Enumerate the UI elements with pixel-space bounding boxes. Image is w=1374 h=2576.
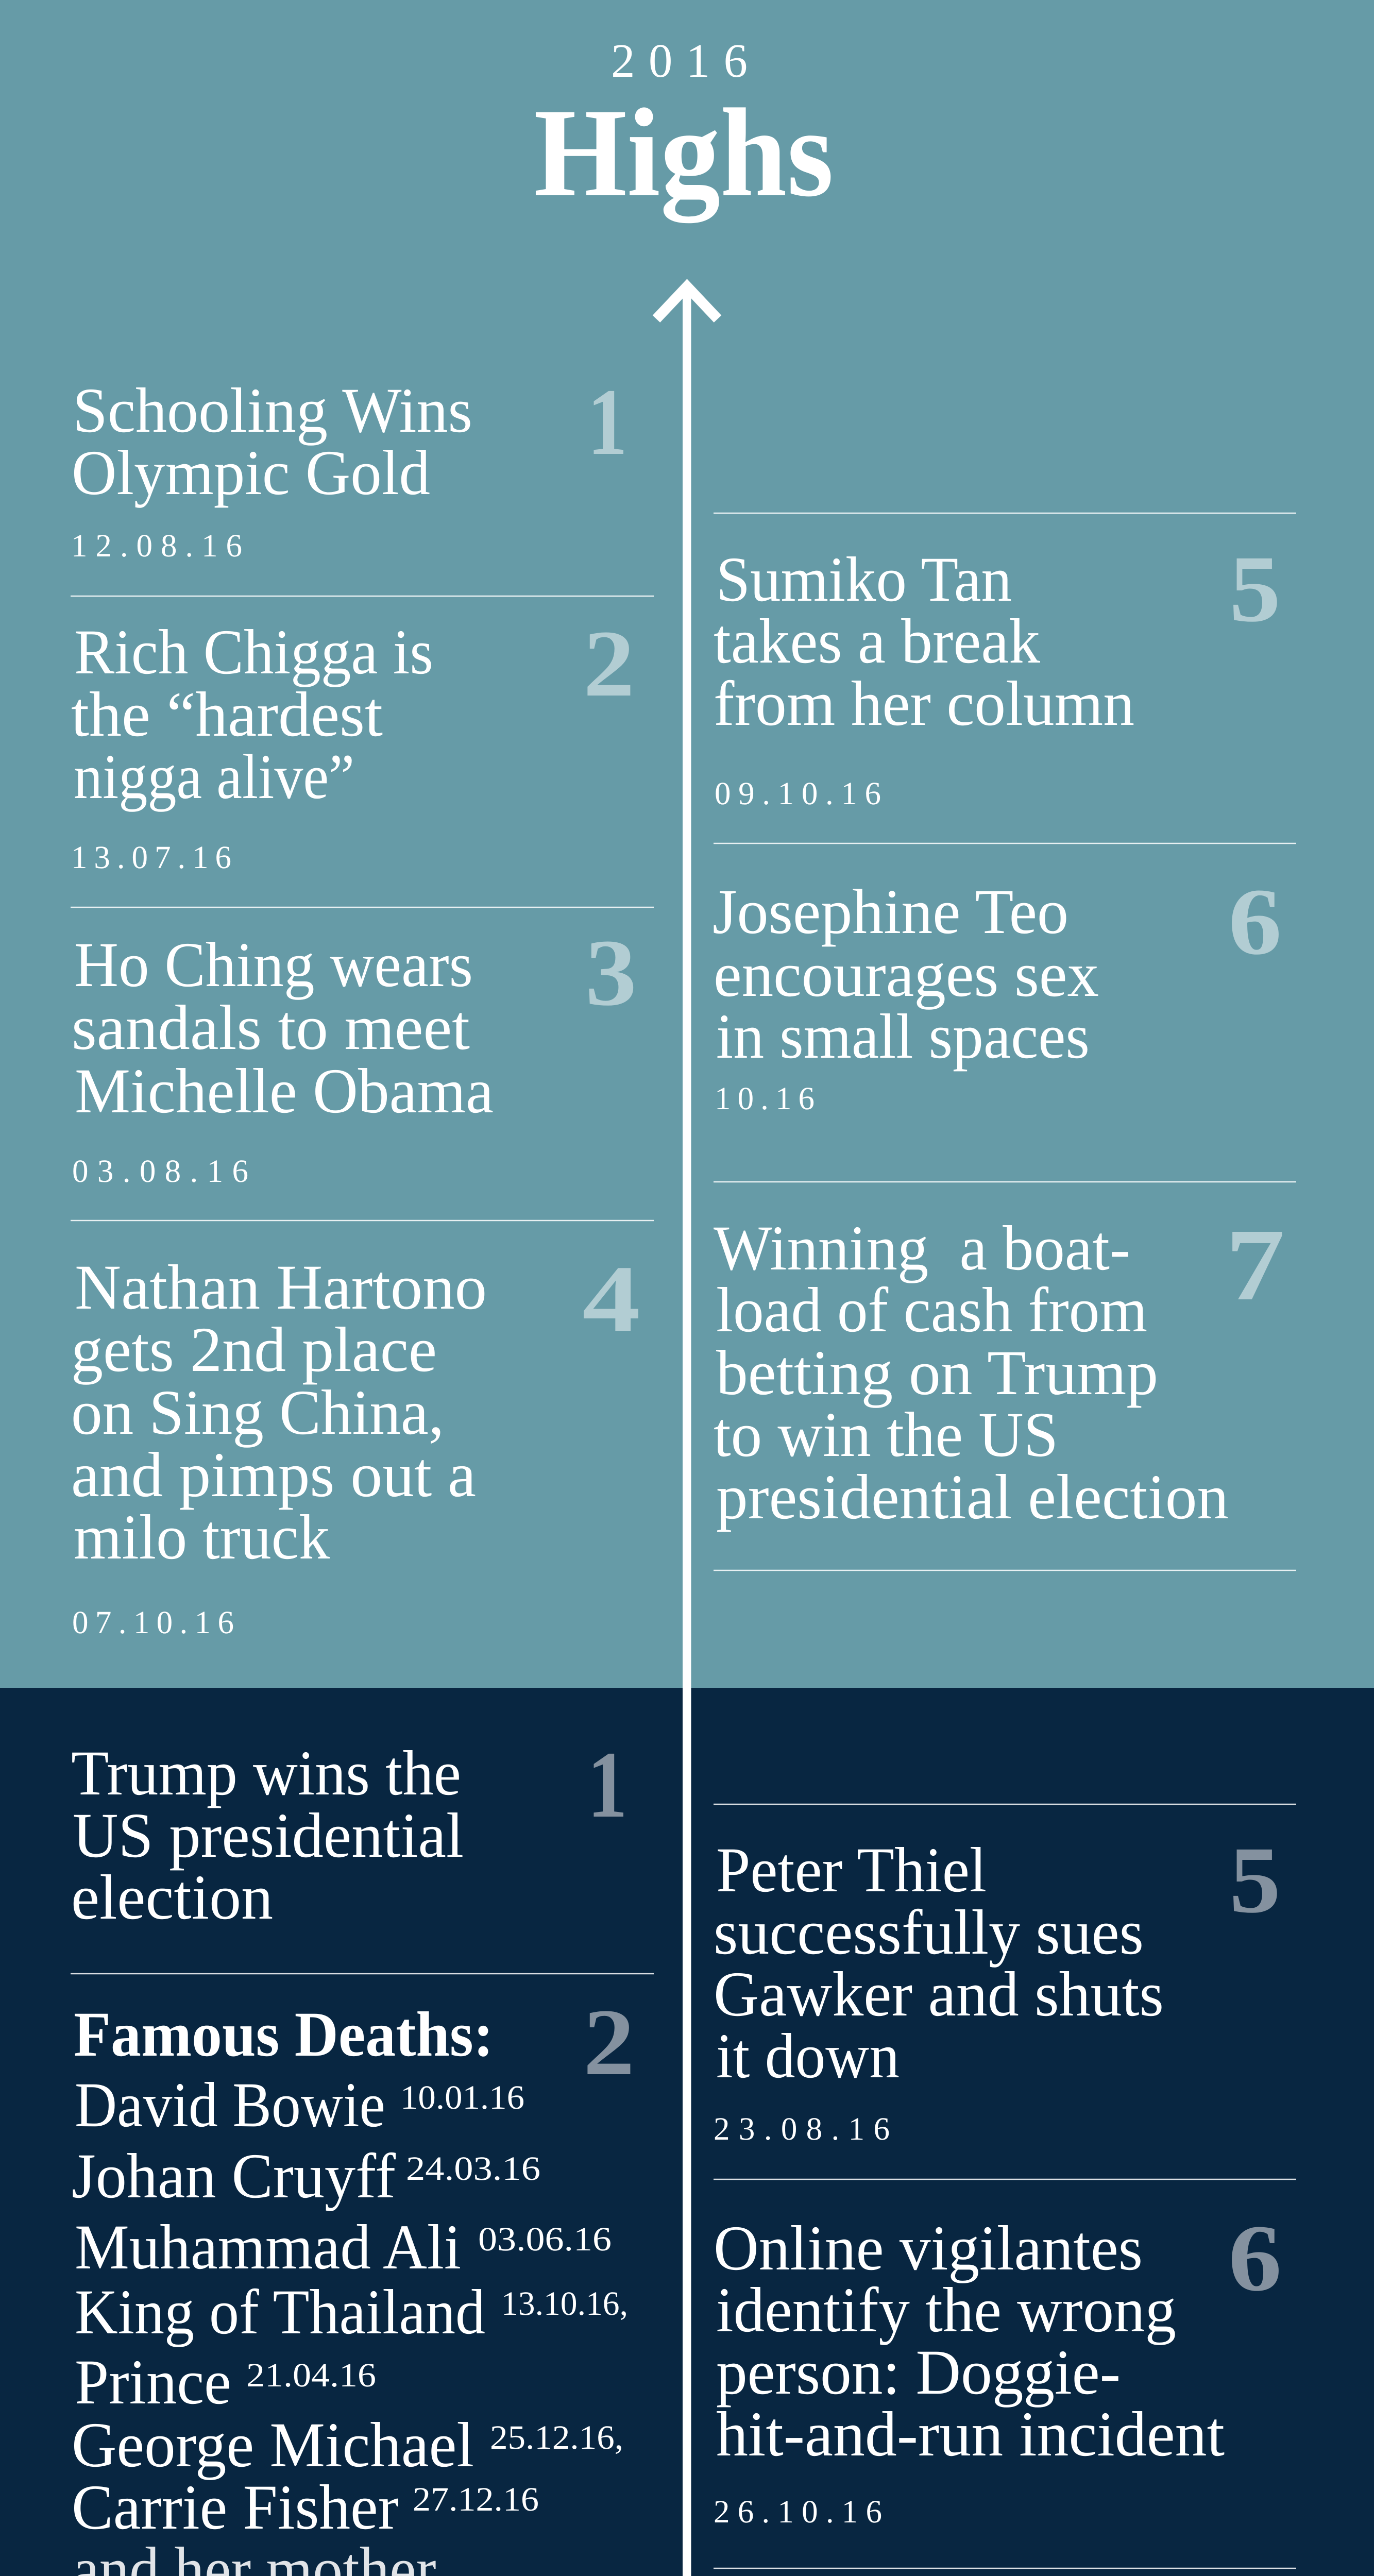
item: high 2: 2	[583, 611, 635, 717]
item: high 5: 5	[1229, 536, 1281, 642]
item: high 7	[714, 1208, 1285, 1532]
item: low 2 famous deaths: 13.10.16,	[501, 2285, 628, 2323]
title: Highs: Highs	[534, 83, 834, 224]
panel: highs right column	[713, 513, 1296, 1570]
item: high 4	[71, 1246, 640, 1640]
item: low 2 famous deaths	[72, 1990, 646, 2576]
item: high 2: Rich Chigga is	[74, 617, 433, 687]
item: low 5: 5	[1229, 1827, 1281, 1933]
item: low 6: person: Doggie-	[716, 2337, 1121, 2408]
item: low 2 famous deaths: 10.01.16	[400, 2079, 524, 2116]
item: low 2 famous deaths: 24.03.16	[406, 2150, 540, 2188]
item: low 6: Online vigilantes	[714, 2213, 1143, 2283]
item: high 7: Winning a boat-	[714, 1213, 1130, 1283]
item: high 4: 4	[582, 1246, 640, 1352]
item: high 2: nigga alive”	[74, 741, 354, 812]
item: low 6: 6	[1228, 2206, 1282, 2311]
item: low 2 famous deaths: Prince	[75, 2347, 231, 2417]
item: low 1: Trump wins the	[71, 1738, 461, 1808]
item: low 5: 23.08.16	[714, 2111, 890, 2147]
item: low 2 famous deaths: Carrie Fisher	[72, 2472, 399, 2543]
item: high 4: 07.10.16	[72, 1604, 234, 1640]
item: high 7: to win the US	[714, 1399, 1058, 1470]
item: high 7: load of cash from	[716, 1275, 1147, 1345]
item: high 1: Schooling Wins	[73, 375, 472, 446]
item: low 2 famous deaths: 27.12.16	[413, 2481, 539, 2518]
item: low 6	[714, 2206, 1282, 2530]
panel: lows right column	[714, 1804, 1296, 2576]
item: low 2 famous deaths: Johan Cruyff	[72, 2141, 396, 2211]
item: low 1: 1	[587, 1732, 627, 1838]
item: high 3: sandals to meet	[72, 992, 470, 1063]
item: high 6: in small spaces	[716, 1001, 1090, 1072]
item: low 6: identify the wrong	[716, 2275, 1176, 2345]
item: high 2: 13.07.16	[71, 839, 231, 875]
item: high 5: from her column	[714, 668, 1134, 739]
item: low 2 famous deaths: 21.04.16	[246, 2357, 376, 2394]
item: low 2 famous deaths: George Michael	[72, 2410, 474, 2480]
item: low 2 famous deaths: 03.06.16	[478, 2221, 612, 2258]
item: high 4: and pimps out a	[71, 1439, 476, 1510]
item: high 1: 1	[587, 369, 627, 475]
panel: lows left column	[71, 1732, 654, 2576]
item: high 4: on Sing China,	[71, 1377, 444, 1448]
item: high 3: Michelle Obama	[75, 1056, 494, 1126]
item: high 6: encourages sex	[714, 939, 1099, 1010]
item: high 3: 3	[585, 920, 637, 1026]
item: low 1	[71, 1732, 627, 1933]
arrow: vertical double-headed	[656, 286, 718, 2576]
item: low 5: Gawker and shuts	[714, 1959, 1164, 2029]
item: low 2 famous deaths: David Bowie	[75, 2070, 385, 2140]
panel: lows background	[0, 1688, 1374, 2576]
item: high 7: presidential election	[716, 1462, 1229, 1532]
panel: highs left column	[71, 369, 654, 1640]
item: high 2: the “hardest	[71, 679, 383, 750]
item: high 5: 09.10.16	[715, 775, 881, 811]
item: low 2 famous deaths: Muhammad Ali	[75, 2212, 461, 2282]
year label: 2016	[611, 35, 748, 88]
item: high 4: Nathan Hartono	[75, 1252, 487, 1323]
item: high 3: 03.08.16	[72, 1153, 248, 1189]
item: low 6: hit-and-run incident	[716, 2399, 1225, 2469]
item: high 4: gets 2nd place	[71, 1314, 437, 1385]
item: high 4: milo truck	[74, 1502, 330, 1572]
item: low 2 famous deaths: 2	[583, 1990, 635, 2095]
item: low 2 famous deaths: 25.12.16,	[490, 2419, 623, 2456]
item: low 5: Peter Thiel	[716, 1835, 987, 1905]
item: high 5: takes a break	[714, 606, 1040, 676]
item: high 6: Josephine Teo	[713, 876, 1068, 947]
item: high 5	[714, 536, 1281, 811]
item: high 5: Sumiko Tan	[716, 544, 1012, 615]
item: high 6	[713, 869, 1282, 1116]
item: high 6: 6	[1228, 869, 1282, 975]
item: high 7: 7	[1226, 1208, 1285, 1322]
item: low 2 famous deaths: Famous Deaths:	[74, 1999, 494, 2070]
item: high 1: Olympic Gold	[72, 437, 430, 508]
item: low 5	[714, 1827, 1281, 2147]
item: high 6: 10.16	[715, 1080, 815, 1116]
item: low 1: election	[71, 1862, 273, 1933]
item: high 3: Ho Ching wears	[74, 929, 473, 1000]
item: high 1: 12.08.16	[71, 528, 242, 564]
item: high 7: betting on Trump	[716, 1337, 1158, 1408]
item: low 5: it down	[716, 2021, 900, 2091]
item: low 2 famous deaths: King of Thailand	[75, 2277, 485, 2347]
panel: highs background	[0, 0, 1374, 1688]
item: low 6: 26.10.16	[714, 2494, 882, 2530]
item: high 2	[71, 611, 635, 875]
item: high 1	[71, 369, 627, 564]
item: low 1: US presidential	[73, 1800, 464, 1871]
item: low 5: successfully sues	[714, 1897, 1144, 1968]
item: high 3	[72, 920, 637, 1189]
